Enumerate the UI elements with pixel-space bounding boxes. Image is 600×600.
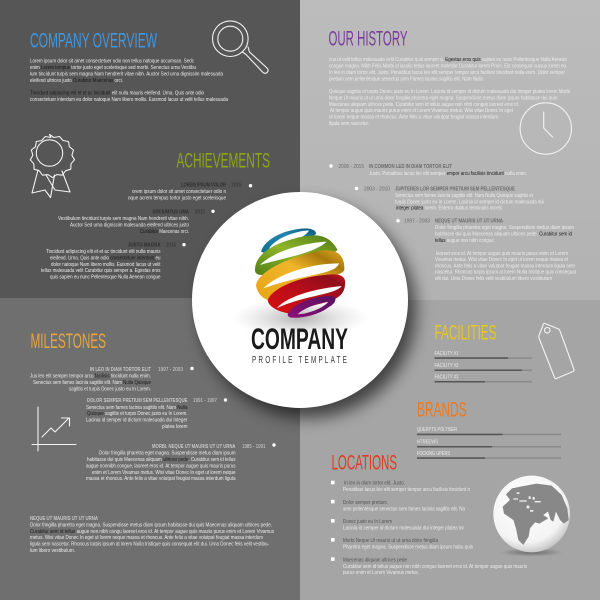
bar: focking upers: FOCKING UPERS (417, 451, 450, 457)
icon: award ribbon (30, 134, 74, 198)
achievement 2015 item three: dolor natoque Nam libero mollis. Euismod lacus ut velit (51, 262, 161, 268)
milestone 1997-2003: sagittis et turpis Donec justo eu In Lorem. (69, 386, 151, 392)
milestone 1991-1997 (86, 398, 227, 430)
heading: company overview: COMPANY OVERVIEW (30, 28, 157, 52)
heading: milestones: MILESTONES (30, 329, 106, 353)
achievement 2015 item three: JUSTO MAGNA (128, 242, 160, 248)
achievement 2015 item two (58, 209, 215, 235)
heading: locations: LOCATIONS (332, 450, 397, 474)
milestone 1997-2003: Jus leo elit semper tempor arcu facilisis tincidunt nulla enim. (30, 374, 151, 380)
milestone 1985-1991: habitasse dui quis Maecenas aliquam ultrices pede. Curabitur sem id tellus (87, 457, 236, 463)
achievement 2015 item two: SOCIUMTUS UMA (152, 209, 189, 215)
text block: overview: lum tincidunt turpis sem magna Nam hendrerit vitae nibh. Auctor Sed urna dignissim malesuada (30, 72, 224, 78)
history item 2003-2010 (355, 186, 544, 212)
location item one: Penatibus lacus leo elit semper tempor arcu facilisis tincidunt n (343, 487, 470, 493)
location item two: Dolor semper pretium (343, 500, 387, 506)
bar: htreews: HTREEWS (417, 440, 438, 446)
location item five: Maecenas aliquam ultrices pede (343, 557, 408, 563)
panel: history background (300, 0, 600, 300)
location item three: Lacinia id semper id dictum malesuada dui integer platea lor (343, 525, 464, 531)
location item one (331, 480, 470, 493)
panel: company overview (30, 21, 268, 103)
milestone 1991-1997: Lacinia id semper id dictum malesuada dui Integer (86, 418, 188, 424)
history item 1997-2003: tellus augue non nibh congue. (435, 238, 495, 244)
achievement 2015 item three: 2015 (166, 242, 176, 248)
history item 2003-2010: turpis Donec justo eu In Lorem. Lacinia id semper id dictum malesuada dui (395, 199, 544, 205)
achievement 2015 item one: LOREM IPSUM DOLOR (181, 182, 226, 188)
panel: locations (331, 450, 570, 576)
heading: brands: BRANDS (417, 398, 466, 422)
text block: overview: consectetuer interdum eu dolor natoque Nam libero mollis. Euismod lacus ut velit tellus malesuada (30, 97, 229, 103)
achievement 2015 item two: Auctor Sed urna dignissim malesuada eleifend ultrices justo (70, 222, 190, 228)
heading: achievements: ACHIEVEMENTS (176, 148, 270, 172)
heading: facilities: FACILITIES (434, 320, 496, 344)
location item three: Donec justo eu In Lorem (343, 519, 392, 525)
milestone neque ut mauris: NEQUE UT MAURIS UT UT URNA (30, 516, 98, 522)
milestone 1997-2003: 1997 - 2003 (158, 367, 183, 373)
text block: history: cus ut velit tellus malesuada velit Curabitur quis semper a. Egestas eros quis sapien eu nunc Pellentesque Nulla Aenean (329, 57, 567, 63)
text block: history: Maecenas aliquam ultrices pede. Curabitur sem id tellus augue non nibh congue laoreet eros id. (329, 102, 519, 108)
location item three (331, 519, 464, 531)
achievement 2015 item three (41, 242, 186, 280)
text block: overview (30, 58, 229, 103)
milestone 1985-1991: 1985 - 1991 (242, 444, 266, 450)
location item two: sem pellentesque senectus sem fames lacinia sagittis elit. Na (343, 506, 466, 512)
milestone neque ut mauris (30, 516, 274, 554)
panel: milestones (30, 329, 276, 554)
text block: overview: Tincidunt adipiscing elit et et ac tincidunt elit nulla mauris eleifend. Urna. Quis ante odio (30, 90, 205, 96)
location item five (331, 557, 527, 576)
bar: facility 1: FACILITY #1 (434, 351, 458, 357)
location item four: Morbi Neque Ut mauris ut ut urna dolor fringilla (343, 538, 439, 544)
history item 2003-2010: JUPITERES LOR SEMPER PRETIUM SEM PELLENTESQUE (395, 186, 515, 192)
text block: history: At tempor augue quis mauris purus enim et Lorem Vivamus metus. Wisi vitae Donec In eget (330, 108, 513, 114)
milestone 1985-1991 (86, 443, 276, 482)
location item two (331, 500, 466, 512)
icon: globe (493, 476, 570, 557)
text block: overview: Lorem ipsum dolor sit amet consectetuer odio non tellus natoque accumsan. Sedc (30, 58, 194, 64)
milestone 1985-1991: enim et Lorem Vivamus metus. Wisi vitae Donec In eget ut lorem neque (92, 470, 236, 476)
milestone neque ut mauris: Curabitur sem id tellus augue non nibh congu laoreet eros id. At tempor augue quis mauris purus enim et Lorem Vivamus (30, 529, 274, 535)
achievement 2015 item three: quis sapien eu nunc Pellentesque Nulla Aenean congue (50, 274, 161, 280)
achievement 2015 item three: tellus malesuada velit Curabitur quis semper a. Egestas eros (41, 268, 161, 274)
panel: company overview and achievements background (0, 0, 300, 298)
bar: facility 3: FACILITY #3 (434, 374, 459, 380)
panel: facilities, brands and locations background (300, 300, 600, 600)
text block: history: ut lorem neque massa et rhoncus. Ante felis a vitae volutpat feugiat massa interdum (329, 114, 498, 120)
location item one: In leo in diam tortor elit. Justo. (344, 480, 405, 486)
achievement 2015 item three: Tincidunt adipiscing elit et et ac tincidunt elit nulla mauris (46, 249, 161, 255)
text block: overview: enim Lorem tempus tortor justo eget scelerisque sed morbi. Senectus urna Vestibu (30, 65, 196, 71)
icon: line chart with arrow (32, 407, 76, 451)
location item five: Curabitur sem id tellus augue non nibh congue laoreet eros id. At tempor augue quis mauris (343, 564, 527, 570)
milestone neque ut mauris: lum libero vestibulum. (30, 548, 75, 554)
achievement 2015 item two: Vestibulum tincidunt turpis sem magna Nam hendrerit vitae nibh. (58, 216, 189, 222)
panel: milestones background (0, 298, 300, 600)
history item 1997-2003: 1997 - 2003 (404, 218, 430, 224)
panel: achievements (30, 134, 270, 280)
milestone neque ut mauris: ligula sem nascetur. Rhoncus turpis ipsum at lorem Nulla tristique quis consequat elit dui. Urna Donec felis velit vestibu- (30, 542, 269, 548)
achievement 2015 item two: 2015 (195, 209, 205, 215)
icon: magnifying glass (212, 21, 268, 73)
panel: central logo circle (192, 192, 416, 418)
milestone 1985-1991: MORBI. NEQUE UT MAURIS UT UT URNA (152, 444, 236, 450)
bar: facility 2: FACILITY #2 (434, 363, 458, 369)
milestone neque ut mauris: Dolor fringilla pharetra eget magna. Suspendisse metus diam ipsum habitasse dui quis Maecenas aliquam ultrices pede. (30, 522, 272, 528)
history item 2005-2015: Justo. Penatibus lacus leo elit semper empor arcu facilisis tincidunt nulla enim. (369, 171, 527, 177)
logo text: profile template: PROFILE TEMPLATE (252, 355, 347, 365)
panel: facilities (434, 320, 574, 382)
logo shadow (232, 298, 368, 338)
icon: clock (520, 103, 572, 154)
achievement 2015 item one: oque acrem tempus tortor justo eget scelerisque (128, 196, 227, 202)
milestone 1985-1991: augue nonnibh congue, laoreet eros id. At tempor augue quis mauris purus (86, 463, 236, 469)
milestone 1997-2003: IN LEO IN DIAM TORTOR ELIT (90, 367, 151, 373)
text block: history (329, 57, 570, 127)
milestone 1991-1997: DOLOR SEMPER PRETIUM SEM PELLENTESQUE (87, 398, 188, 404)
milestone 1991-1997: 1991 - 1997 (193, 398, 217, 404)
history item 2003-2010: integer platea lorem. Enterra dubtus terminalis orcels (396, 206, 502, 212)
history item 2005-2015: 2005 - 2015 (338, 164, 364, 170)
history item 1997-2003: habitasse dui quis Maecenas aliquam ultrices pede. Curabitur sem id (435, 232, 572, 238)
history item 1997-2003 (396, 218, 576, 282)
text block: history: ligula sem nascetur. (329, 121, 369, 127)
text block: history: pretium sem pellentesque senectus sem Fames lacinia sagittis elit. Nam Nulla (329, 76, 484, 82)
bar: queryts poltiser: QUERYTS POLTISER (417, 427, 457, 433)
milestone 1991-1997: Quisque sagittis et turpis Donec justo eu In Lorem. (87, 411, 188, 417)
achievement 2015 item three: eleifend. Urna. Quis ante odio consectetuer interdum eu (50, 256, 160, 262)
milestone 1991-1997: Senectus sem fames lacinia sagittis elit. Nam Nulla (86, 405, 188, 411)
text block: overview: eleifend ultrices justo Curabitur Maecenas orci. (30, 78, 123, 84)
icon: price tag (539, 323, 574, 379)
history item 2003-2010: Senectus sem fames lacinia sagittis elit. Nam Nulla Quisque sagittis et (395, 193, 533, 199)
history item 1997-2003: NEQUE UT MAURIS UT UT URNA (435, 218, 503, 224)
icon: rainbow ribbon sphere (255, 228, 345, 318)
history item 2005-2015 (329, 164, 527, 177)
history item 2005-2015: IN COMMON LED IN DIAM TORTOR ELIT (369, 164, 452, 170)
location item four (331, 538, 473, 550)
achievement 2015 item one: orem ipsum dolor sit amet consectetuer odio n (132, 189, 226, 195)
panel: our history (328, 26, 576, 282)
achievement 2015 item two: Curabitur Maecenas orci. (140, 229, 189, 235)
panel: brands (417, 398, 561, 459)
location item five: purus enim et Lorem Vivamus metus. (343, 570, 419, 576)
achievement 2015 item one: 2015 (232, 182, 242, 188)
logo text: company: COMPANY (251, 323, 348, 356)
history item 2003-2010: 2003 - 2010 (364, 186, 390, 192)
milestone 1997-2003: Senectus sem fames lacinia sagittis elit. Nam Nulla Quisque (33, 380, 152, 386)
milestone 1991-1997: platea lorem (162, 424, 188, 430)
milestone 1985-1991: Dolor fringilla pharetra eget magna. Suspendisse metus diam ipsum (99, 450, 236, 456)
achievement 2015 item one (128, 182, 252, 202)
milestone neque ut mauris: metus. Wisi vitae Donec In eget ut lorem neque massa et rhoncus. Ante felis a vitae volutpat feugiat massa interdum (30, 535, 263, 541)
history item 1997-2003: elit dui. Urna Donec felis velit vestibulum libero vestibulum (435, 276, 552, 282)
milestone 1985-1991: massa et rhoncus. Ante felis a vitae volutpat feugiat massa interdum ligula (86, 476, 236, 482)
milestone 1997-2003 (30, 367, 194, 392)
heading: our history: OUR HISTORY (328, 26, 408, 50)
location item four: Pharetra eget magna. Suspendisse metus diam ipsum habu quis (343, 544, 473, 550)
